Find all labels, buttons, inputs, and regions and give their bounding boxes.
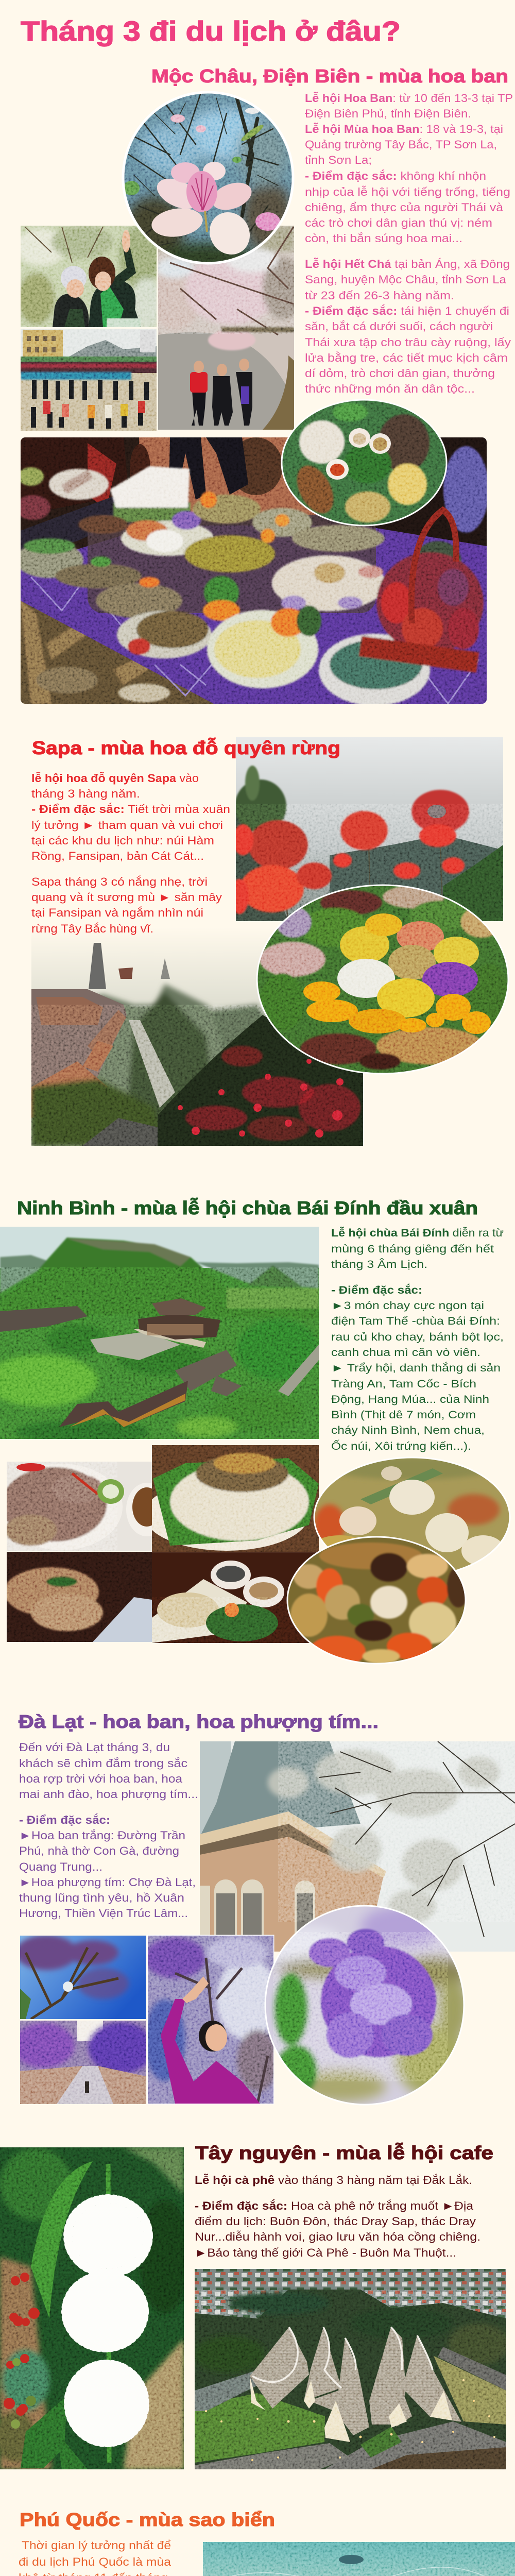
text block: coffee festival: điểm du lịch: Buôn Đôn, thác Dray Sap, thác Dray <box>195 2215 476 2228</box>
photo frame: woman in ao dai <box>147 1935 274 2104</box>
text block: Sapa festival: tại Fansipan và ngắm nhìn núi <box>31 906 203 919</box>
text block: Sapa festival: Sapa tháng 3 có nắng nhẹ, trời <box>31 875 208 888</box>
text block: Moc Chau festivals: Thái xưa tập cho trâu cày ruộng, lấy <box>305 336 511 349</box>
photo: purple trees along road <box>13 2021 154 2104</box>
text block: Moc Chau festivals: các trò chơi dân gian thú vị: ném <box>305 216 492 229</box>
text block: Da Lat highlights: thung lũng tình yêu, hồ Xuân <box>19 1891 184 1904</box>
photo: goat meat <box>1 1462 167 1551</box>
text block: Moc Chau festivals: Quảng trường Tây Bắc, TP Sơn La, <box>305 138 497 151</box>
text block: Da Lat highlights: ►Hoa phượng tím: Chợ Đà Lạt, <box>19 1876 196 1889</box>
text block: Moc Chau festivals: dí dỏm, trò chơi dân gian, thưởng <box>305 367 495 380</box>
text block: Moc Chau festivals: lửa bằng tre, các tiết mục kịch câm <box>305 351 508 364</box>
text block: Phu Quoc highlights <box>19 2539 174 2576</box>
text block: Moc Chau festivals: - Điểm đặc sắc: không khí nhộn <box>305 170 486 182</box>
heading: Moc Chau: Mộc Châu, Điện Biên - mùa hoa ban <box>151 65 508 87</box>
photo: jacaranda tree and blue sky <box>15 1935 146 2019</box>
text block: Moc Chau festivals: Lễ hội Hoa Ban : từ 10 đến 13-3 tại TP <box>305 92 513 105</box>
text block: Moc Chau festivals: từ 23 đến 26-3 hàng năm. <box>305 289 454 302</box>
text block: Da Lat highlights: Phú, nhà thờ Con Gà, đường <box>19 1844 179 1857</box>
text block: coffee festival: Lễ hội cà phê vào tháng 3 hàng năm tại Đắk Lắk. <box>195 2174 472 2187</box>
text block: Sapa festival: rừng Tây Bắc hùng vĩ. <box>31 922 153 935</box>
text block: Moc Chau festivals: Sang, huyện Mộc Châu, tỉnh Sơn La <box>305 273 507 286</box>
text block: Moc Chau festivals: - Điểm đặc sắc: tái hiện 1 chuyến đi <box>305 304 509 317</box>
text block: Da Lat highlights: hoa rợp trời với hoa ban, hoa <box>19 1772 183 1785</box>
text block: Bai Dinh festival: Ốc núi, Xôi trứng kiến...). <box>331 1440 471 1452</box>
photo: woman in ao dai <box>144 1936 278 2104</box>
text block: Bai Dinh festival: điện Tam Thế -chùa Bái Đính: <box>331 1315 500 1327</box>
text block: Da Lat highlights: Quang Trung... <box>19 1860 102 1873</box>
text block: Sapa festival: tháng 3 hàng năm. <box>31 787 140 800</box>
text block: Sapa festival <box>31 772 230 935</box>
text block: Sapa festival: lý tưởng ► tham quan và vui chơi <box>31 819 223 832</box>
photo: coffee museum aerial <box>193 2269 510 2469</box>
photo: sticky rice with ants eggs <box>144 1445 319 1552</box>
text block: Sapa festival: - Điểm đặc sắc: Tiết trời mùa xuân <box>31 803 230 816</box>
circle border: sticky rice <box>257 885 508 1074</box>
photo: crowd dancing in circle <box>21 329 157 431</box>
heading: Sapa: Sapa - mùa hoa đỗ quyên rừng <box>32 737 340 758</box>
text block: Bai Dinh festival: tháng 3 Âm Lịch. <box>331 1259 427 1270</box>
text block: Bai Dinh festival: ► Trẩy hội, danh thắng di sản <box>331 1362 501 1374</box>
text block: Sapa festival: quang và ít sương mù ► săn mây <box>31 891 222 904</box>
photo: starfish beach and woman <box>203 2542 515 2576</box>
photo: braised vegetables in circle <box>287 1537 470 1667</box>
text block: Sapa festival: lễ hội hoa đỗ quyên Sapa vào <box>31 772 199 785</box>
text block: Da Lat highlights <box>19 1741 198 1920</box>
text block: Moc Chau festivals: thức những món ăn dân tộc... <box>305 382 475 395</box>
photo: five colour sticky rice in circle <box>257 885 509 1074</box>
photo: jacaranda blossoms in circle <box>265 1906 469 2105</box>
text block: Da Lat highlights: khách sẽ chìm đắm trong sắc <box>19 1757 187 1770</box>
text block: Bai Dinh festival: mùng 6 tháng giêng đến hết <box>331 1243 494 1255</box>
text block: Moc Chau festivals: Lễ hội Mùa hoa Ban : 18 và 19-3, tại <box>305 123 503 135</box>
text block: Bai Dinh festival: Lễ hội chùa Bái Đính diễn ra từ <box>331 1227 504 1239</box>
circle border: flower <box>123 92 293 263</box>
panel: Phu Quoc <box>19 2509 515 2576</box>
photo: crispy burnt rice <box>4 1552 152 1642</box>
title: Tháng 3 đi du lịch ở đâu? <box>21 16 401 47</box>
panel: Moc Chau, Dien Bien <box>15 65 513 706</box>
photo: mountain food plate in circle <box>282 400 447 526</box>
photo: temple in mist with rhododendron <box>31 927 363 1146</box>
photo: Bai Dinh pagoda aerial <box>0 1227 319 1445</box>
text block: Da Lat highlights: Hương, Thiền Viện Trúc Lâm... <box>19 1907 188 1920</box>
text block: Moc Chau festivals <box>305 92 513 395</box>
text block: Moc Chau festivals: Điện Biên Phủ, tỉnh Điện Biên. <box>305 107 471 120</box>
photo: spring rolls plate with dips <box>152 1552 319 1643</box>
text block: Moc Chau festivals: săn, bắt cá dưới suối, cách người <box>305 320 493 333</box>
panel: Sapa <box>31 737 509 1146</box>
photo: vegetarian soup in circle <box>314 1457 510 1577</box>
text block: Bai Dinh festival: canh chua mì căn vò viên. <box>331 1347 480 1359</box>
text block: Bai Dinh festival: cháy Ninh Bình, Nem chua, <box>331 1425 485 1436</box>
panel: Da Lat <box>13 1711 515 2105</box>
text block: Bai Dinh festival: ►3 món chay cực ngon tại <box>331 1300 484 1312</box>
text block: Da Lat highlights: Đến với Đà Lạt tháng 3, du <box>19 1741 170 1754</box>
text block: Da Lat highlights: - Điểm đặc sắc: <box>19 1814 110 1826</box>
text block: Bai Dinh festival: Động, Hang Múa... của Ninh <box>331 1394 489 1405</box>
text block: Bai Dinh festival <box>331 1227 504 1452</box>
text block: Bai Dinh festival: rau củ kho chay, bánh bột lọc, <box>331 1331 504 1343</box>
heading: Phu Quoc: Phú Quốc - mùa sao biển <box>20 2509 275 2530</box>
text block: Phu Quoc highlights: Thời gian lý tưởng nhất để <box>22 2539 171 2552</box>
circle border: mountain food plate <box>282 400 447 526</box>
text block: Da Lat highlights: ►Hoa ban trắng: Đường Trần <box>19 1829 185 1842</box>
text block: Moc Chau festivals: Lễ hội Hết Chá tại bản Áng, xã Đông <box>305 258 510 270</box>
heading: Da Lat: Đà Lạt - hoa ban, hoa phượng tím... <box>19 1711 379 1732</box>
text block: Sapa festival: tại các khu du lịch như: núi Hàm <box>31 834 214 847</box>
text block: Sapa festival: Rồng, Fansipan, bản Cát Cát... <box>31 850 204 862</box>
circle border: jacaranda <box>265 1906 464 2105</box>
text block: Da Lat highlights: mai anh đào, hoa phượng tím... <box>19 1788 198 1801</box>
photo: Bauhinia flower in circle <box>123 92 294 273</box>
text block: Bai Dinh festival: Bình (Thịt dê 7 món, Cơm <box>331 1409 476 1421</box>
photo: three women under blossoming trees <box>158 226 294 430</box>
text block: Moc Chau festivals: còn, thi bắn súng hoa mai... <box>305 232 462 245</box>
photo: Da Lat church with white blossoms <box>200 1741 515 1952</box>
text block: Bai Dinh festival: - Điểm đặc sắc: <box>331 1284 422 1296</box>
heading: Ninh Binh: Ninh Bình - mùa lễ hội chùa Bái Đính đầu xuân <box>17 1197 478 1218</box>
photo: coffee flowers and berries <box>0 2147 191 2469</box>
text block: coffee festival <box>195 2174 480 2259</box>
photo: mist and azalea <box>230 737 503 921</box>
circle border: soup <box>314 1458 510 1577</box>
panel: Ninh Binh <box>0 1197 510 1667</box>
text block: Moc Chau festivals: nhịp của lễ hội với tiếng trống, tiếng <box>305 185 510 198</box>
text block: coffee festival: Nur...diễu hành voi, giao lưu văn hóa cồng chiêng. <box>195 2230 480 2243</box>
panel: Tay Nguyen <box>0 2142 510 2469</box>
text block: Moc Chau festivals: tỉnh Sơn La; <box>305 154 372 166</box>
text block: Moc Chau festivals: chiêng, ẩm thực của người Thái và <box>305 201 504 214</box>
circle border: braised vegetables <box>287 1537 466 1664</box>
text block: Phu Quoc highlights: đi du lịch Phú Quốc là mùa <box>19 2555 171 2568</box>
heading: Tay Nguyen: Tây nguyên - mùa lễ hội cafe <box>195 2142 493 2163</box>
photo: festival food table <box>15 437 489 706</box>
text block: coffee festival: ►Bảo tàng thế giới Cà Phê - Buôn Ma Thuột... <box>195 2246 456 2259</box>
photo: two women in ethnic dress <box>15 226 162 330</box>
text block: Bai Dinh festival: Tràng An, Tam Cốc - Bích <box>331 1378 476 1390</box>
text block: coffee festival: - Điểm đặc sắc: Hoa cà phê nở trắng muốt ►Địa <box>195 2199 474 2212</box>
